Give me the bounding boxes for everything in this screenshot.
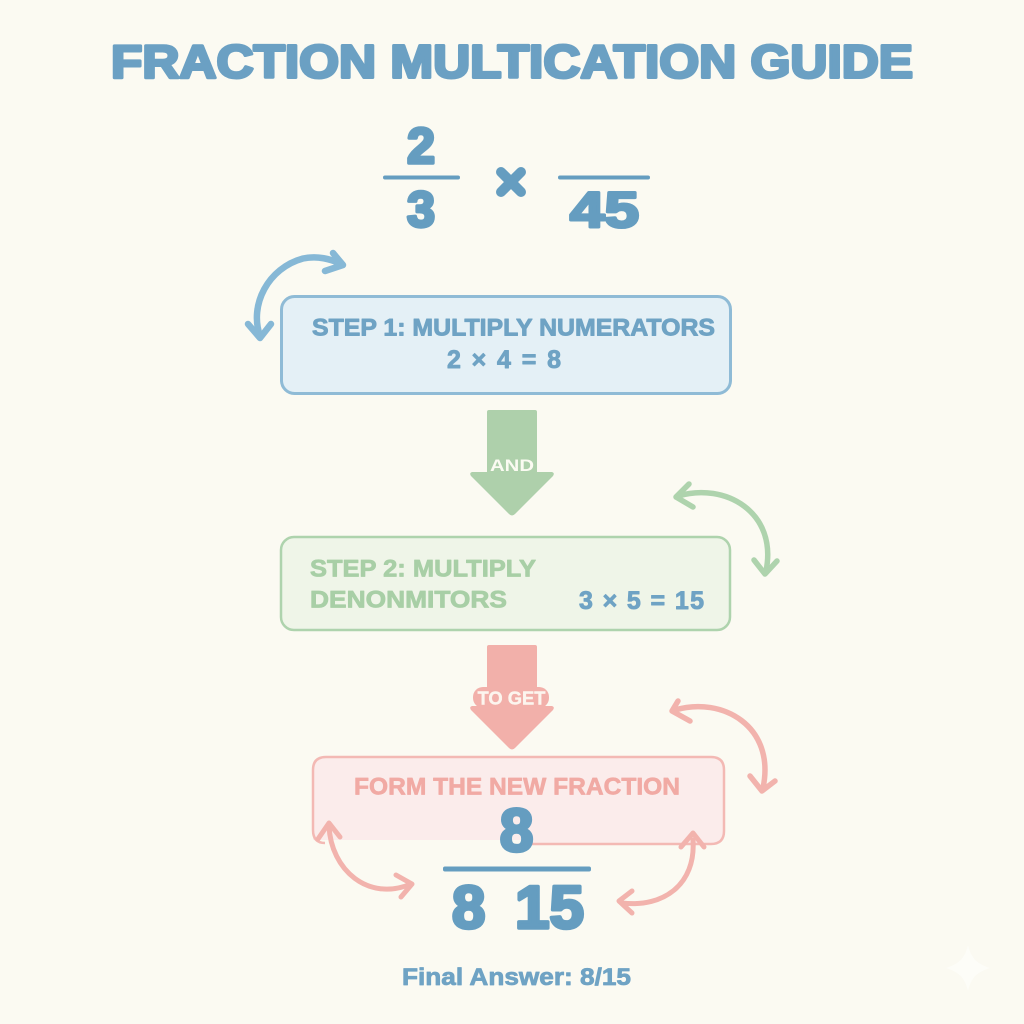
curved arrow: green — [676, 484, 777, 574]
arrow: to get: TO GET — [478, 688, 546, 708]
curved arrow: red bottom right — [619, 833, 704, 913]
title: FRACTION MULTICATION GUIDE — [111, 36, 913, 88]
second fraction: 45 — [570, 182, 639, 238]
result fraction: 15 — [515, 874, 584, 941]
panel: step 2: DENONMITORS — [310, 586, 507, 614]
panel: form the new fraction — [313, 757, 724, 844]
arrow: and: AND — [490, 456, 534, 475]
first fraction: 3 — [407, 182, 435, 238]
curved arrow: blue — [248, 253, 343, 338]
first fraction: 2 — [407, 118, 435, 174]
arrow: to get — [470, 645, 554, 750]
curved arrow: red top right — [672, 701, 775, 791]
panel: step 1 — [282, 296, 730, 394]
multiplication sign — [501, 172, 521, 192]
step 1 heading: STEP 1: MULTIPLY NUMERATORS — [312, 314, 715, 342]
second fraction — [558, 176, 650, 238]
step 1 calculation: 2 × 4 = 8 — [447, 346, 561, 374]
icon: sparkle watermark — [946, 945, 990, 991]
arrow: and — [470, 410, 554, 516]
panel: step 2 — [281, 537, 730, 630]
final answer: Final Answer: 8/15 — [402, 964, 631, 991]
curved arrow: red bottom left — [318, 823, 412, 897]
result fraction: 8 — [452, 874, 485, 941]
step 2 calculation: 3 × 5 = 15 — [579, 587, 704, 615]
step 2 heading: STEP 2: MULTIPLY — [310, 556, 536, 582]
result fraction: 8 — [500, 797, 533, 864]
result fraction — [443, 797, 591, 941]
top equation — [383, 118, 650, 238]
heading: FORM THE NEW FRACTION — [354, 774, 680, 800]
first fraction — [383, 118, 460, 238]
